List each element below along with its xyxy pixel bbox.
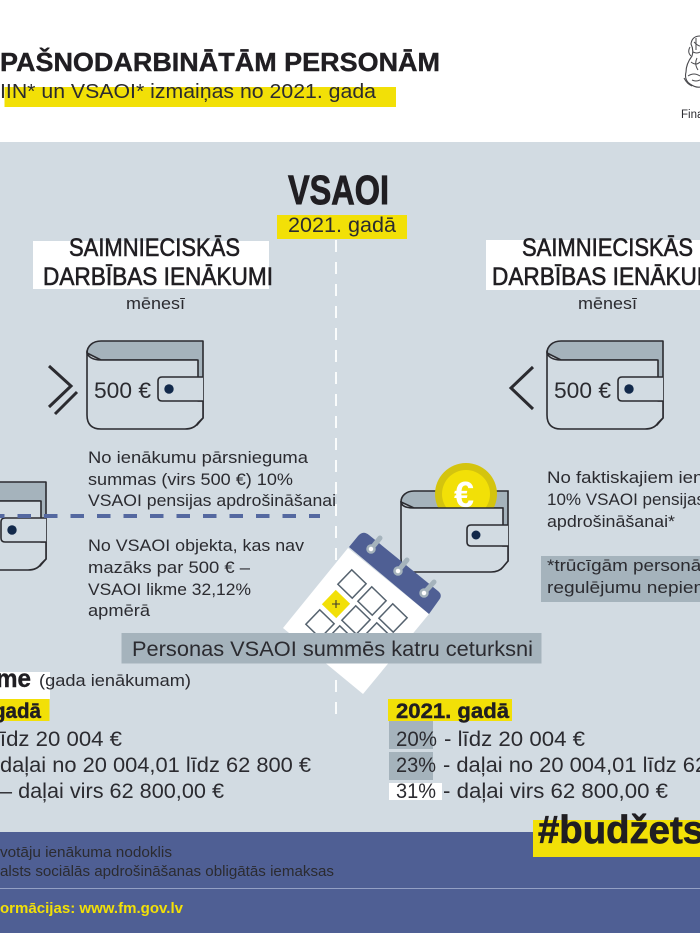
left tax brackets: – daļai virs 62 800,00 € (0, 780, 224, 803)
banner: quarterly payment: Personas VSAOI summēs katru ceturksni (132, 637, 533, 661)
main panel background (0, 142, 700, 832)
icon: wallet 500 euro left (87, 341, 203, 429)
text: above 500 euro (88, 448, 336, 510)
left tax brackets (0, 728, 311, 803)
right tax brackets: 31% (396, 780, 436, 803)
heading: income tax rate, cropped (0, 665, 50, 699)
text: above 500 euro: No ienākumu pārsnieguma (88, 448, 309, 467)
header title: PAŠNODARBINĀTĀM PERSONĀM (0, 47, 440, 77)
text: above 500 euro: summas (virs 500 €) 10% (88, 470, 293, 489)
right tax brackets: - līdz 20 004 € (444, 728, 585, 751)
logo: coat of arms, cropped (684, 36, 700, 87)
right caption: mēnesī: mēnesī (578, 294, 637, 313)
horizontal dashed line (0, 514, 320, 518)
text: actual income (547, 468, 700, 531)
icon: calendar (283, 533, 441, 694)
icon: cropped wallet left (0, 482, 46, 570)
text: VSAOI object: mazāks par 500 € – (88, 558, 251, 577)
icon: wallet 500 euro left: 500 € (94, 378, 151, 403)
right tax brackets: 23% (396, 754, 436, 777)
text: above 500 euro: VSAOI pensijas apdrošināšanai (88, 491, 336, 510)
left caption: mēnesī: mēnesī (126, 294, 185, 313)
caption: annual income: (gada ienākumam) (39, 671, 191, 690)
subtitle with highlight: IIN* un VSAOI* izmaiņas no 2021. gada (0, 81, 377, 103)
year badge right: 2021. gadā (396, 700, 509, 723)
text: VSAOI object: No VSAOI objekta, kas nav (88, 536, 305, 555)
note: low-income persons (541, 556, 700, 602)
footnotes (0, 845, 334, 880)
right tax brackets (389, 721, 700, 803)
icon: greater-or-equal sign (49, 366, 77, 414)
right tax brackets: 20% (396, 728, 437, 751)
note: low-income persons: *trūcīgām personām (547, 556, 700, 575)
footnotes: votāju ienākuma nodoklis (0, 845, 172, 861)
text: VSAOI object: apmērā (88, 601, 151, 620)
icon: wallet with euro coin (401, 463, 508, 572)
text: actual income: apdrošināšanai* (547, 512, 675, 531)
text: VSAOI object: VSAOI likme 32,12% (88, 580, 251, 599)
panel: left income heading (33, 234, 273, 291)
more information link: ormācijas: www.fm.gov.lv (0, 900, 184, 917)
panel: right income heading (486, 234, 700, 291)
heading: VSAOI: VSAOI (288, 167, 389, 213)
right tax brackets: - daļai virs 62 800,00 € (443, 780, 668, 803)
icon: less-than sign (511, 367, 533, 409)
vertical dashed divider (335, 240, 337, 716)
footnotes: alsts sociālās apdrošināšanas obligātās iemaksas (0, 864, 334, 880)
panel: left income heading: DARBĪBAS IENĀKUMI (43, 263, 273, 291)
icon: wallet with euro coin: € (454, 474, 474, 515)
footer divider (0, 888, 700, 889)
panel: left income heading: SAIMNIECISKĀS (69, 234, 240, 262)
left tax brackets: daļai no 20 004,01 līdz 62 800 € (0, 754, 311, 777)
text: VSAOI object (88, 536, 305, 620)
icon: wallet 500 euro right: 500 € (554, 378, 611, 403)
footer band (0, 832, 700, 933)
icon: wallet 500 euro right (547, 341, 663, 429)
year badge: 2021. gadā: 2021. gadā (288, 213, 396, 237)
